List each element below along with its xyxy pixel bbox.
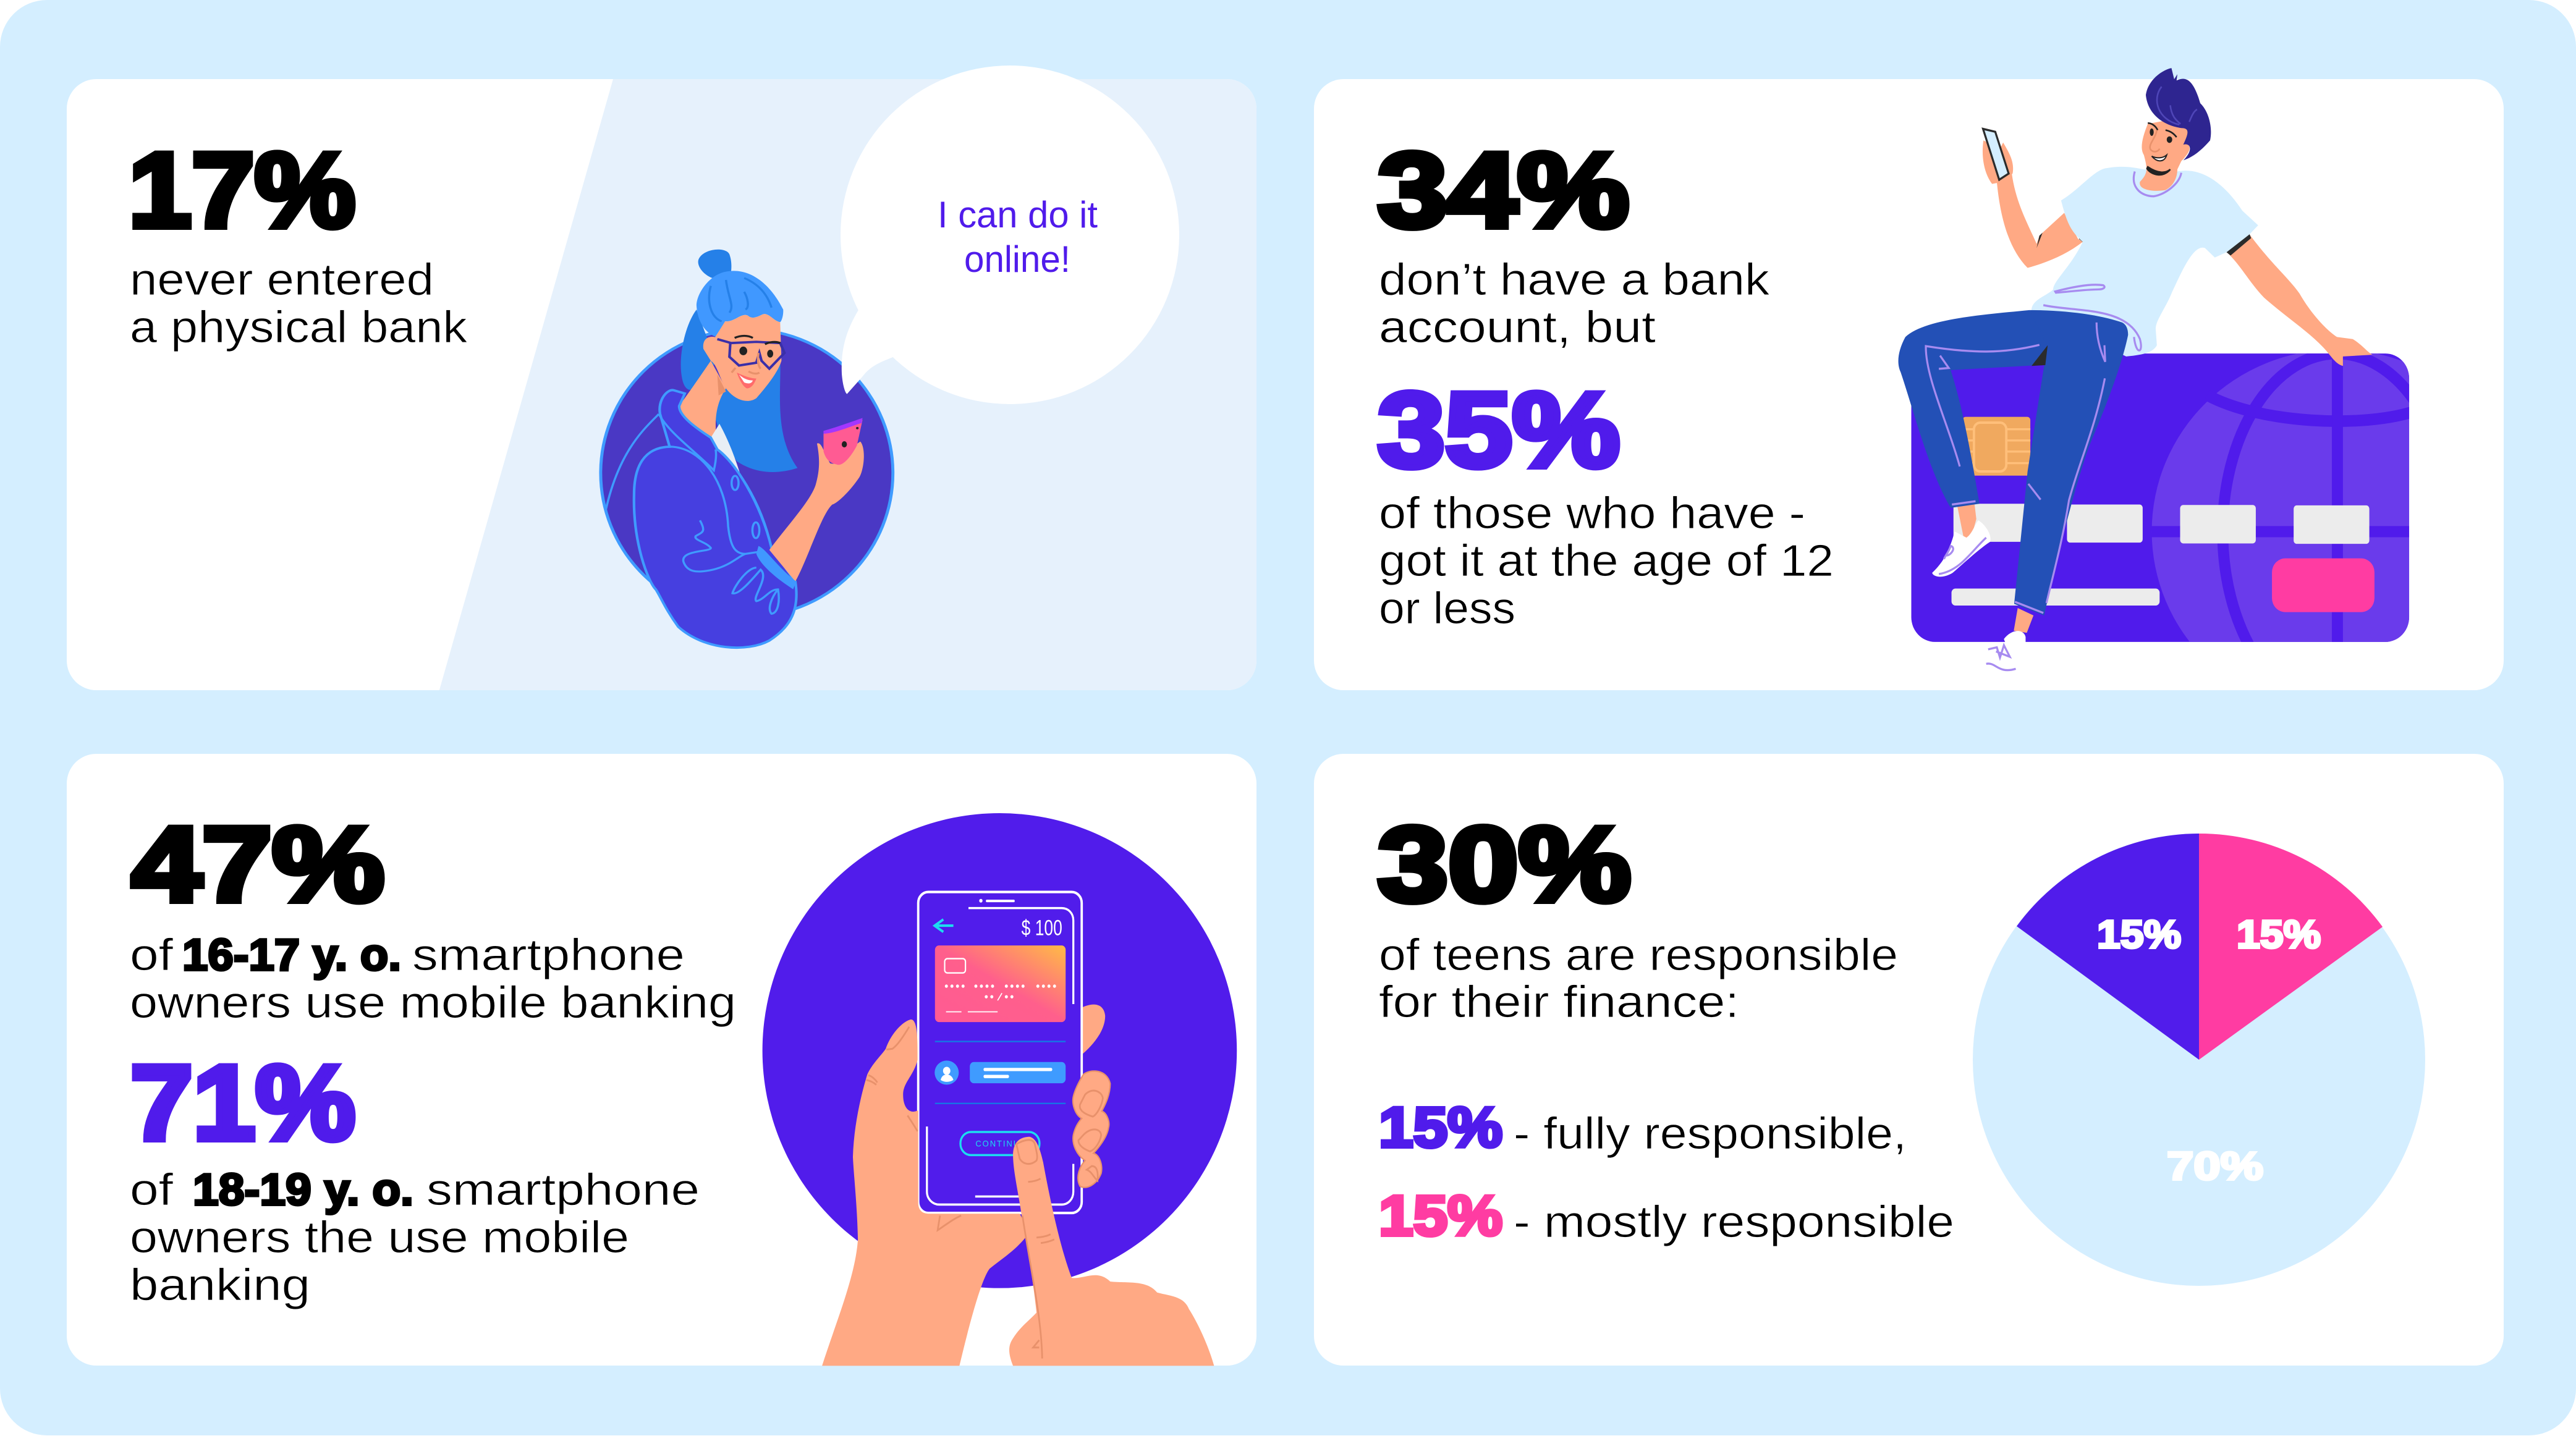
text: never entered a physical bank (130, 255, 468, 352)
stat: 17%: 17% (129, 131, 355, 250)
callout: speech bubble: I can do it (938, 194, 1098, 235)
legend: 15% fully responsible: 15% (1379, 1096, 1502, 1159)
diagonal tinted panel area (439, 79, 1261, 692)
panel: responsible for finance (1314, 754, 2504, 1366)
stat: 30%: 30% (1378, 805, 1631, 924)
text: of 18-19 y. o. smartphone owners the use mobile banking: 18-19 y. o. (193, 1165, 413, 1215)
legend: 15% mostly responsible (1379, 1185, 1954, 1248)
illustration: hands holding smartphone (763, 813, 1237, 1366)
stat: 47%: 47% (132, 805, 384, 924)
text: of those who have got it at the age of 12 or less: or less (1379, 584, 1515, 633)
text: of teens are responsible for their finance (1379, 931, 1898, 1027)
text: of 18-19 y. o. smartphone owners the use mobile banking (130, 1165, 700, 1310)
panel: don't have a bank account (1314, 68, 2522, 714)
pie chart: 15% (2237, 912, 2321, 957)
text: of 16-17 y. o. smartphone owners use mobile banking: of (130, 931, 174, 980)
text: of 16-17 y. o. smartphone owners use mobile banking: owners use mobile banking (130, 978, 736, 1028)
icon: smartphone (918, 892, 1082, 1213)
text: of 18-19 y. o. smartphone owners the use mobile banking: banking (130, 1261, 310, 1310)
text: of 16-17 y. o. smartphone owners use mobile banking: smartphone (412, 931, 685, 980)
illustration: man sitting on a bank card (1899, 68, 2409, 671)
legend: 15% mostly responsible: - mostly responsible (1514, 1197, 1954, 1247)
pie chart (1973, 834, 2425, 1286)
text: don't have a bank account, but: account, but (1379, 303, 1656, 352)
left hand (822, 1020, 1030, 1366)
icon: smartphone: CONTINUE (975, 1139, 1026, 1149)
callout: speech bubble: online! (964, 239, 1070, 280)
text: don't have a bank account, but: don’t have a bank (1379, 255, 1770, 305)
legend: 15% fully responsible: - fully responsible, (1514, 1109, 1907, 1159)
illustration: girl with phone (601, 250, 893, 648)
pie chart: 70% (2167, 1144, 2263, 1188)
text: never entered a physical bank: a physical bank (130, 303, 468, 352)
right hand pointing finger (1009, 1137, 1214, 1366)
panel: never entered a physical bank (67, 65, 1261, 692)
figure: man (1899, 68, 2373, 670)
text: of those who have got it at the age of 12 or less: got it at the age of 12 (1379, 536, 1834, 586)
text: never entered a physical bank: never entered (130, 255, 434, 305)
stat: 35%: 35% (1378, 371, 1620, 489)
text: of 16-17 y. o. smartphone owners use mobile banking (130, 931, 736, 1028)
text: of teens are responsible for their finance: of teens are responsible (1379, 931, 1898, 980)
right hand fingers on phone edge (1073, 1071, 1110, 1188)
icon: bank card (1911, 353, 2409, 642)
text: of 16-17 y. o. smartphone owners use mobile banking: 16-17 y. o. (182, 931, 401, 980)
text: of 18-19 y. o. smartphone owners the use mobile banking: owners the use mobile (130, 1213, 629, 1262)
text: don't have a bank account, but (1379, 255, 1770, 352)
stat: 34%: 34% (1378, 131, 1629, 250)
panel: mobile banking (67, 754, 1256, 1366)
callout: speech bubble (841, 65, 1179, 404)
legend: 15% mostly responsible: 15% (1379, 1185, 1502, 1248)
icon: $ 100 amount: $ 100 (1022, 916, 1062, 940)
stat: 71%: 71% (130, 1044, 355, 1162)
text: of teens are responsible for their finance: for their finance: (1379, 978, 1739, 1027)
text: of 18-19 y. o. smartphone owners the use mobile banking: smartphone (426, 1165, 700, 1215)
text: of those who have got it at the age of 12 or less: of those who have - (1379, 489, 1805, 538)
text: of those who have got it at the age of 12 or less (1379, 489, 1834, 633)
legend: 15% fully responsible (1379, 1096, 1907, 1159)
text: of 18-19 y. o. smartphone owners the use mobile banking: of (130, 1165, 174, 1215)
pie chart: 15% (2097, 912, 2181, 957)
